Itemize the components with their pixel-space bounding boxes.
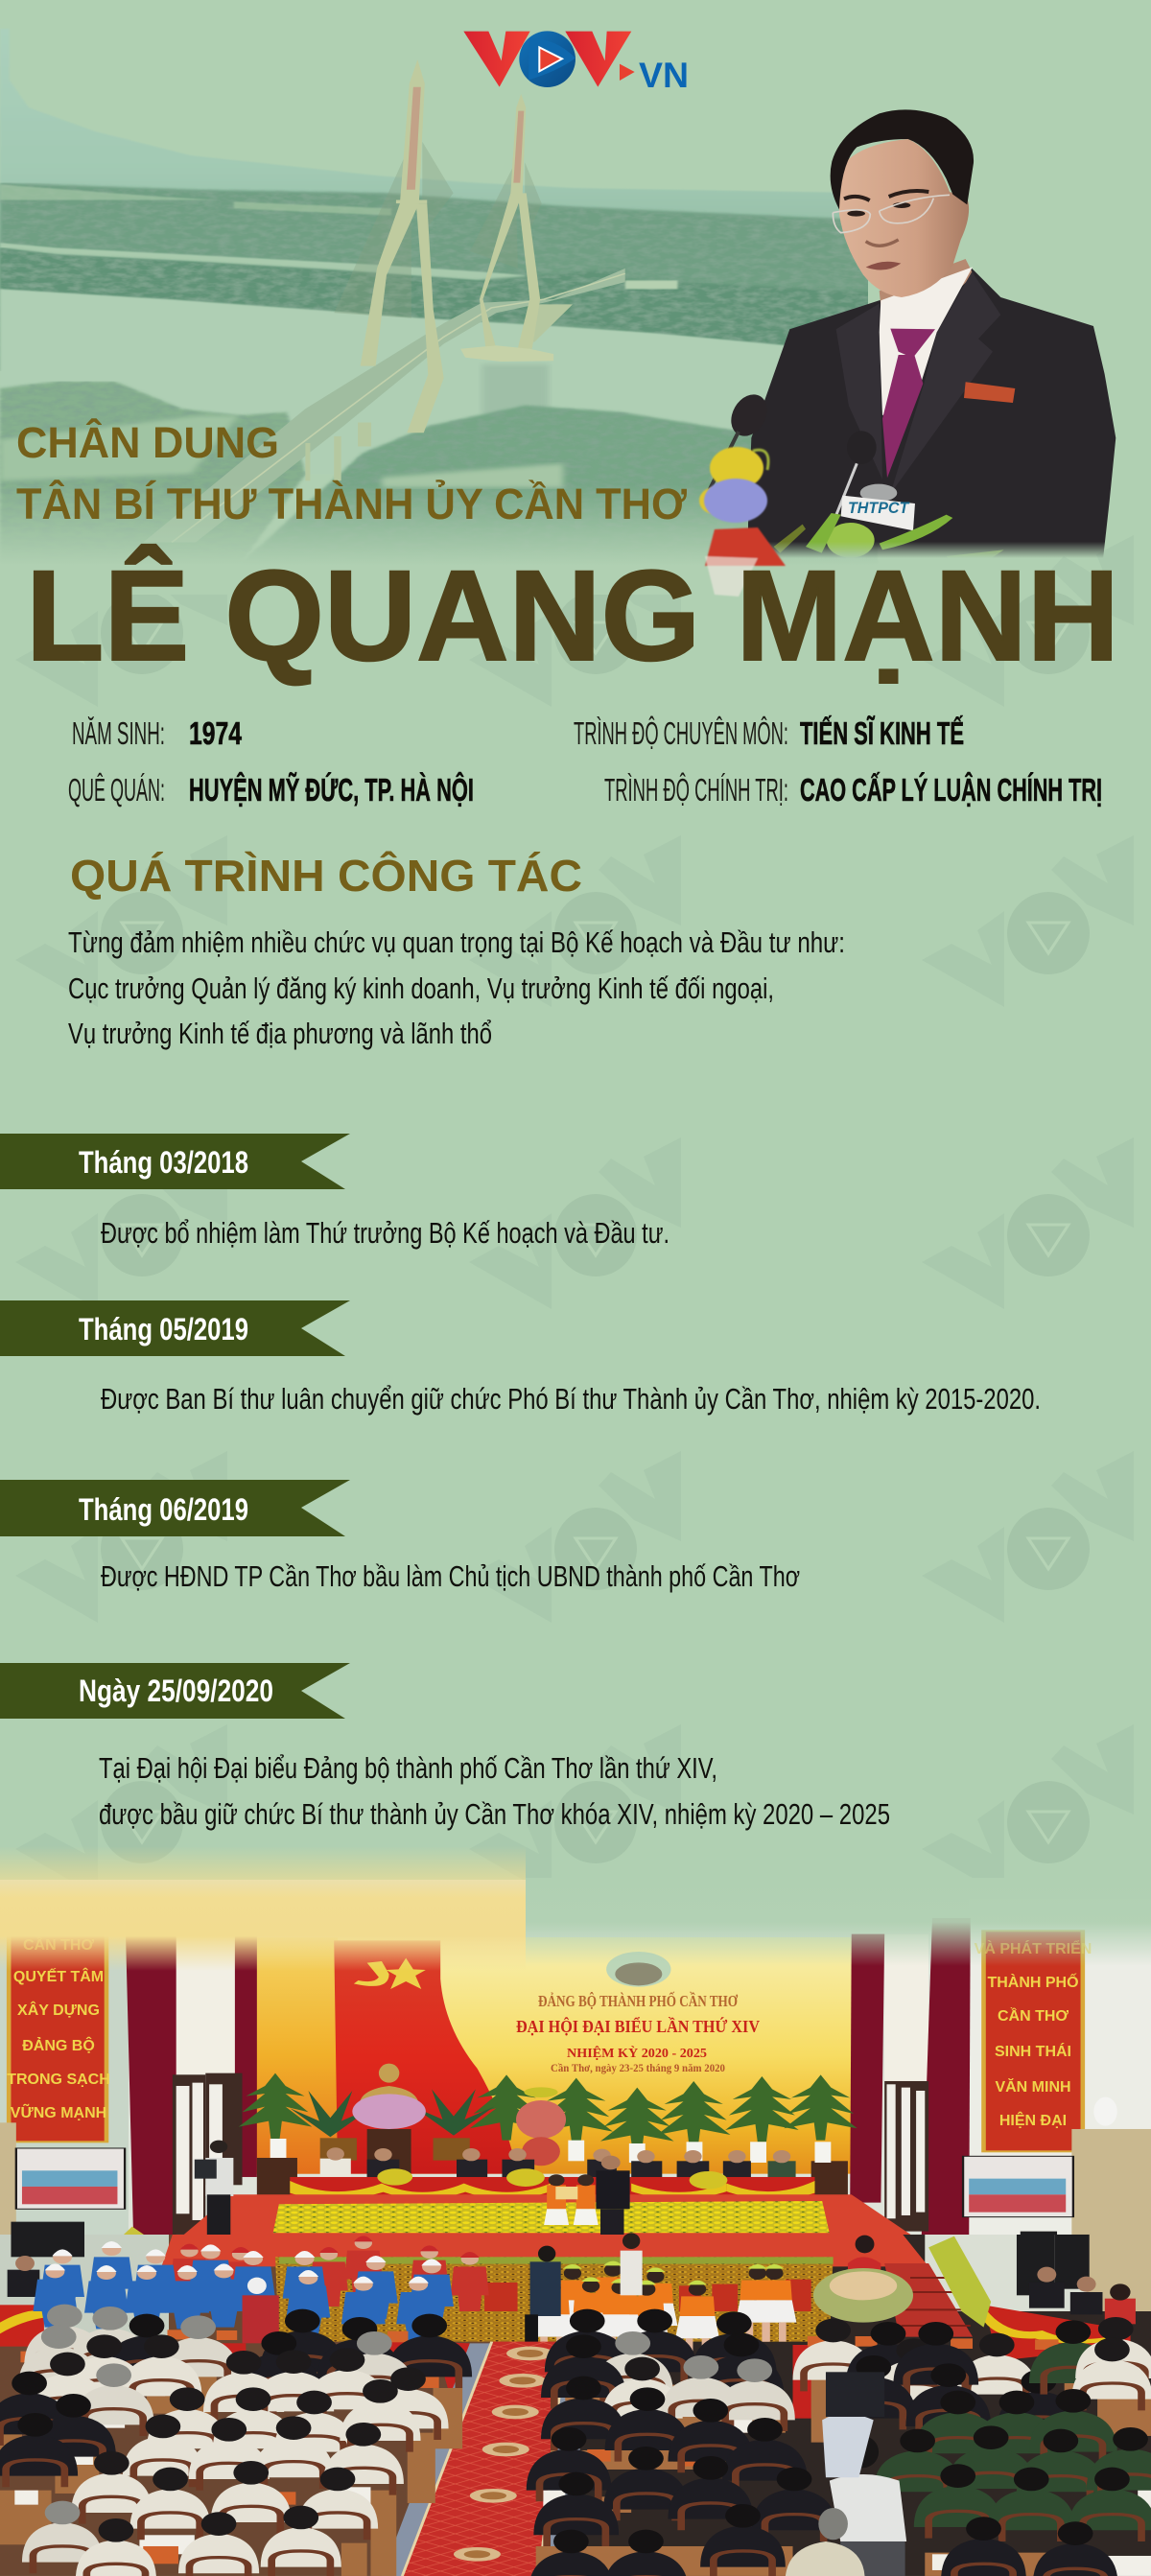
portrait: Lê Quang Mạnh (748, 109, 1116, 563)
papers (14, 2386, 1151, 2576)
band children (33, 2236, 489, 2340)
photo fade into background (0, 484, 959, 566)
carpet aisle (382, 2343, 580, 2576)
stage carpet (173, 2194, 925, 2244)
security camera (1093, 2097, 1117, 2126)
neck (879, 259, 973, 305)
bio: professional qualification: TIẾN SĨ KINH TẾ (800, 715, 964, 751)
desks left (0, 2362, 462, 2576)
banner text left: TRONG SẠCH (7, 2072, 110, 2088)
carpet medallions (454, 2347, 553, 2562)
backdrop text: Cần Thơ, ngày 23-25 tháng 9 năm 2020 (551, 2061, 725, 2074)
red and white flower (705, 527, 786, 597)
banner text left: QUYẾT TÂM (13, 1967, 104, 1985)
presenter and children (544, 2156, 630, 2244)
timeline ribbon: Ngày 25/09/2020: Ngày 25/09/2020 (79, 1674, 273, 1708)
face (839, 139, 969, 297)
stage speakers and left desk (11, 2235, 1090, 2295)
yellow floral strip (928, 2236, 991, 2328)
presidium members (320, 2159, 796, 2180)
hair (831, 109, 974, 209)
timeline ribbon: Tháng 05/2019 (0, 1300, 350, 1356)
red dress speaker (848, 2236, 881, 2273)
backdrop text: NHIỆM KỲ 2020 - 2025 (567, 2045, 707, 2061)
timeline text 3: Được HĐND TP Cần Thơ bầu làm Chủ tịch UBND thành phố Cần Thơ (101, 1559, 800, 1593)
stairs (884, 2263, 973, 2337)
presidium table (290, 2177, 814, 2201)
timeline ribbon: Ngày 25/09/2020 (0, 1663, 350, 1719)
palms (290, 2089, 494, 2161)
beige side curtains (1071, 2129, 1151, 2244)
red flag (334, 1940, 518, 2174)
congress hall photo (0, 1846, 1151, 2576)
stage flowers (273, 2201, 830, 2233)
timeline ribbon: Tháng 05/2019: Tháng 05/2019 (79, 1312, 248, 1347)
banner text right: HIỆN ĐẠI (999, 2111, 1067, 2129)
hall top fade, right (526, 1878, 1151, 1966)
conductor (243, 2278, 279, 2343)
bio: political qualification (604, 772, 1102, 808)
pink flowers (352, 2094, 426, 2129)
curtains (125, 1899, 971, 2244)
title line 2: TÂN BÍ THƯ THÀNH ỦY CẦN THƠ (16, 480, 688, 528)
suit (748, 269, 1116, 559)
front row guest (786, 2508, 865, 2576)
microphone centre (825, 431, 915, 544)
timeline text 1: Được bổ nhiệm làm Thứ trưởng Bộ Kế hoạch và Đầu tư. (101, 1216, 669, 1250)
trees (239, 2073, 857, 2163)
banner text right: THÀNH PHỐ (987, 1972, 1079, 1991)
yellow flowers (699, 447, 768, 514)
banner text left: XÂY DỰNG (17, 2001, 100, 2019)
backdrop text: ĐẢNG BỘ THÀNH PHỐ CẦN THƠ (538, 1991, 739, 2010)
bridge pier (460, 345, 553, 362)
emblem (606, 1952, 670, 1987)
name badge (964, 382, 1015, 403)
microphone centre: THTPCT (848, 499, 910, 517)
left video screen (16, 2148, 125, 2209)
sunflower panel (275, 2257, 834, 2342)
bio: birth year: NĂM SINH: (72, 715, 165, 751)
banner text right: CẦN THƠ (998, 2006, 1069, 2025)
right banner (984, 1931, 1083, 2151)
banner text right: VÀ PHÁT TRIỂN (975, 1939, 1092, 1957)
bio: hometown (68, 771, 474, 808)
timeline ribbon: Tháng 06/2019 (0, 1480, 350, 1536)
intro paragraph (68, 925, 845, 1050)
table bouquets (377, 2168, 727, 2190)
bridge cables (334, 142, 542, 318)
speakers (11, 2222, 1090, 2244)
tablecloths (217, 2340, 814, 2419)
right video screen (963, 2156, 1073, 2217)
bio: political qualification: TRÌNH ĐỘ CHÍNH TRỊ: (604, 772, 788, 808)
shirt (880, 267, 973, 415)
bouquet (813, 2268, 913, 2323)
bridge deck (143, 269, 625, 543)
green leaves (773, 513, 1003, 557)
banner text right: SINH THÁI (995, 2042, 1071, 2060)
left guest table (0, 2305, 44, 2347)
blue flower pot (704, 479, 767, 523)
intro paragraph: Vụ trưởng Kinh tế địa phương và lãnh thổ (68, 1017, 492, 1050)
section heading: QUÁ TRÌNH CÔNG TÁC (70, 851, 582, 901)
timeline ribbon: Tháng 03/2018: Tháng 03/2018 (79, 1145, 248, 1180)
glasses (833, 195, 950, 233)
Ho Chi Minh bust (360, 2064, 418, 2102)
press photographers (822, 2372, 906, 2576)
flower corner (114, 2227, 158, 2244)
title line 1: CHÂN DUNG (16, 418, 279, 467)
bio: hometown: QUÊ QUÁN: (68, 772, 165, 808)
bio: hometown: HUYỆN MỸ ĐỨC, TP. HÀ NỘI (189, 771, 474, 808)
officials at right table (8, 2256, 1136, 2324)
hall lower part: audience (0, 2233, 1151, 2576)
watermark pattern (15, 535, 1134, 1896)
timeline text 4: Tại Đại hội Đại biểu Đảng bộ thành phố Cần Thơ lần thứ XIV, (99, 1751, 717, 1785)
logo: VOV.VN: VN (639, 56, 689, 95)
eyes and brows (844, 191, 928, 217)
microphone left (705, 388, 774, 499)
tv reporter (525, 2233, 643, 2362)
hall top fade, left (0, 1846, 526, 1971)
left banner (9, 1931, 106, 2142)
lapels (836, 271, 1000, 494)
backdrop text (516, 1991, 760, 2074)
timeline text 4: được bầu giữ chức Bí thư thành ủy Cần Thơ khóa XIV, nhiệm kỳ 2020 – 2025 (99, 1797, 890, 1831)
logo: VOV.VN (463, 31, 689, 95)
timeline text 4 (99, 1751, 890, 1831)
right guest table (984, 2305, 1131, 2361)
red name cards (20, 2330, 1138, 2564)
orange children (530, 2261, 796, 2357)
doors (173, 2073, 928, 2235)
banner text left: CẦN THƠ (23, 1935, 94, 1954)
timeline ribbon: Tháng 06/2019: Tháng 06/2019 (79, 1492, 248, 1527)
right audience (527, 2309, 1151, 2576)
flower wreath (516, 2087, 566, 2166)
banner text left: VỮNG MẠNH (11, 2102, 106, 2121)
backdrop (253, 1937, 866, 2174)
left audience (0, 2305, 472, 2576)
hammer and sickle, star (354, 1958, 426, 1989)
banner text right: VĂN MINH (995, 2077, 1071, 2096)
nose and mouth (866, 240, 901, 270)
stage floor (161, 2235, 928, 2266)
desks right (536, 2366, 1151, 2576)
timeline ribbon: Tháng 03/2018 (0, 1134, 350, 1189)
intro paragraph: Từng đảm nhiệm nhiều chức vụ quan trọng tại Bộ Kế hoạch và Đầu tư như: (68, 925, 845, 959)
intro paragraph: Cục trưởng Quản lý đăng ký kinh doanh, Vụ trưởng Kinh tế đối ngoại, (68, 972, 774, 1005)
pedestals (257, 2129, 848, 2201)
banner text left: ĐẢNG BỘ (22, 2036, 95, 2054)
bridge photo (0, 29, 878, 566)
bio: professional qualification: TRÌNH ĐỘ CHUYÊN MÔN: (574, 715, 788, 751)
red lettering on sunflower panel (484, 2280, 811, 2311)
bridge tower one (361, 59, 444, 433)
backdrop text: ĐẠI HỘI ĐẠI BIỂU LẦN THỨ XIV (516, 2016, 760, 2036)
hall upper part: stage (0, 1880, 1151, 2244)
banner text right (975, 1939, 1092, 2129)
tie (882, 329, 935, 478)
bridge tower two (480, 94, 540, 349)
bio: birth year: 1974 (189, 715, 242, 751)
cameraman (195, 2141, 233, 2236)
banner text left (7, 1935, 110, 2121)
name heading: LÊ QUANG MẠNH (26, 545, 1119, 688)
